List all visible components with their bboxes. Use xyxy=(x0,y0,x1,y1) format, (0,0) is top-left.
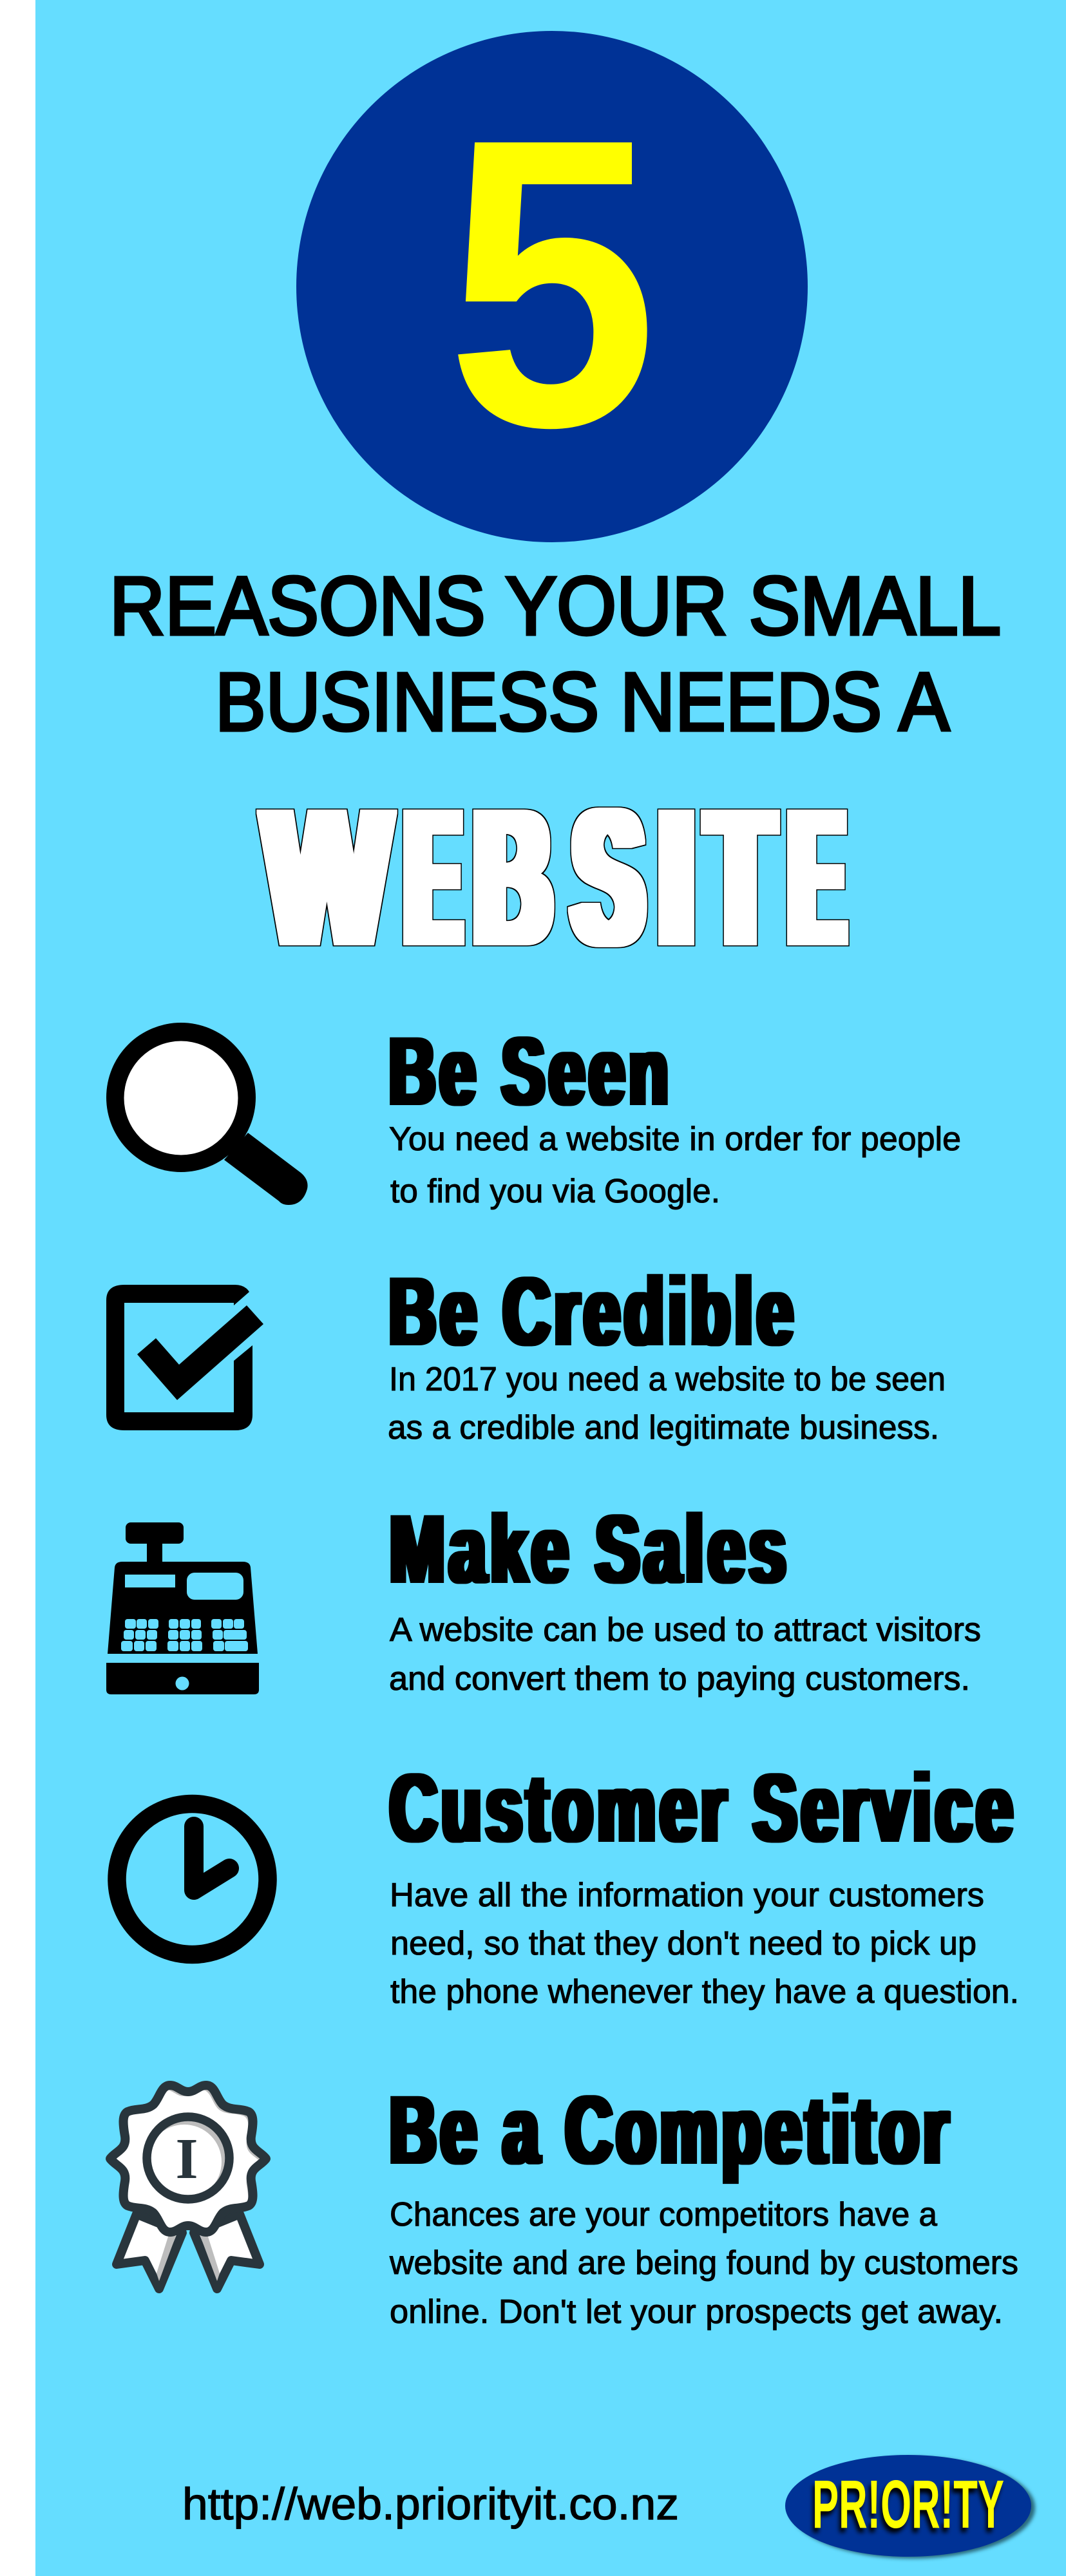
title word: WEBSITE: E xyxy=(407,770,459,985)
reason 1: Be Seen: You need a website in order for people xyxy=(389,1121,961,1158)
medal centre xyxy=(147,2117,229,2199)
reason 4: Customer Service: need, so that they don't need to pick up xyxy=(390,1925,976,1962)
reason 3: Make Sales: and convert them to paying customers. xyxy=(389,1660,970,1698)
logo: Priority xyxy=(785,2455,1035,2559)
icon: checkbox xyxy=(106,1285,263,1430)
icon: magnifying glass xyxy=(106,1023,308,1205)
reason 3: Make Sales xyxy=(389,1495,981,1698)
title lines xyxy=(109,560,1001,748)
reason 2: Be Credible: Be Credible xyxy=(389,1257,797,1365)
infographic canvas: E xyxy=(791,770,842,985)
reason 3: Make Sales: Make Sales xyxy=(390,1495,790,1603)
title word: WEBSITE: S xyxy=(574,770,642,985)
left ribbon xyxy=(117,2214,182,2289)
reason 1: Be Seen: Be Seen xyxy=(389,1017,672,1125)
title word: WEBSITE: B xyxy=(475,770,550,985)
title word: WEBSITE: T xyxy=(709,770,772,985)
hero circle with number 5 xyxy=(296,31,808,542)
reason 4: Customer Service: the phone whenever they have a question. xyxy=(390,1973,1019,2011)
rosette xyxy=(106,2085,266,2237)
reason 5: Be a Competitor xyxy=(389,2076,1018,2331)
reason 5: Be a Competitor: Chances are your competitors have a xyxy=(390,2196,937,2233)
title lines: REASONS YOUR SMALL xyxy=(109,560,1001,652)
reason 2: Be Credible xyxy=(388,1257,946,1446)
icon: award rosette badge xyxy=(106,2085,266,2289)
icon: clock xyxy=(117,1804,268,1955)
reason 5: Be a Competitor: website and are being found by customers xyxy=(389,2244,1018,2282)
title word: WEBSITE: I xyxy=(659,770,694,985)
reason 4: Customer Service: Have all the information your customers xyxy=(390,1877,984,1914)
title lines: BUSINESS NEEDS A xyxy=(215,656,950,748)
hero circle with number 5: 5 xyxy=(446,53,658,513)
reason 2: Be Credible: In 2017 you need a website to be seen xyxy=(389,1361,946,1398)
reason 1: Be Seen xyxy=(389,1017,961,1210)
title word: WEBSITE: W xyxy=(265,770,390,985)
icon: cash register xyxy=(106,1522,259,1694)
right ribbon xyxy=(194,2214,260,2289)
reason 1: Be Seen: to find you via Google. xyxy=(390,1173,720,1210)
reason 3: Make Sales: A website can be used to attract visitors xyxy=(390,1611,981,1649)
website url: http://web.priorityit.co.nz xyxy=(182,2479,679,2529)
reason 2: Be Credible: as a credible and legitimate business. xyxy=(388,1409,939,1446)
reason 4: Customer Service xyxy=(390,1754,1019,2011)
reason 5: Be a Competitor: online. Don't let your prospects get away. xyxy=(390,2293,1003,2331)
medal centre: I xyxy=(175,2127,198,2191)
